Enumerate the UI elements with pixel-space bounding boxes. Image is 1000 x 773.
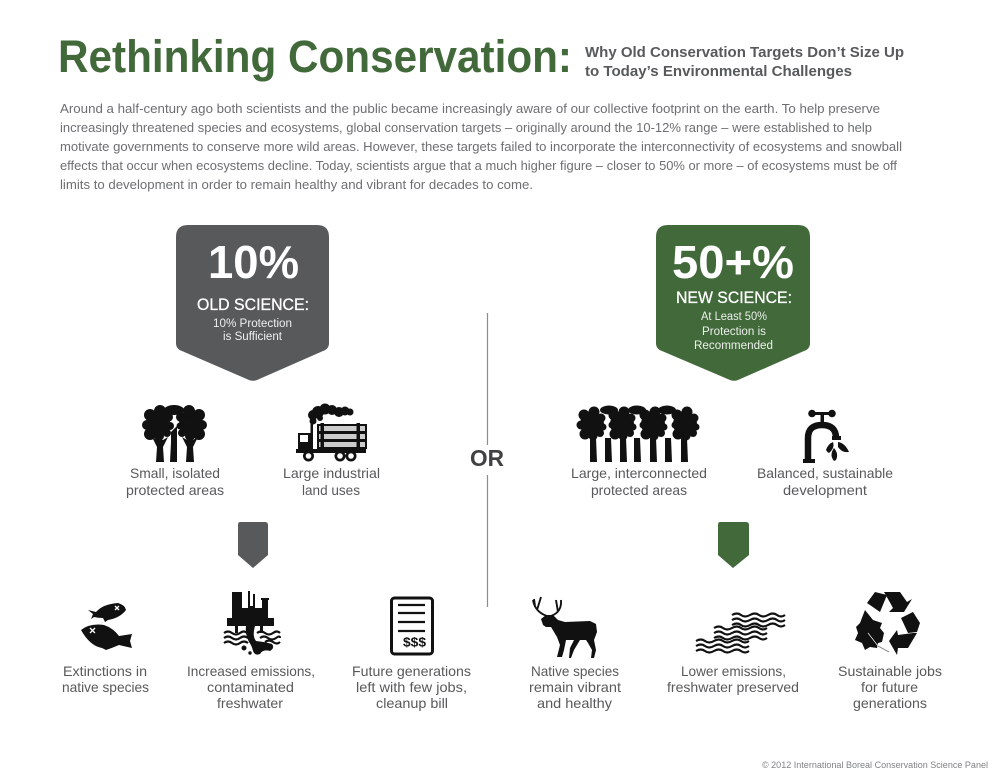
label [352, 664, 471, 711]
subtitle: to Today’s Environmental Challenges [585, 64, 852, 80]
intro text block: motivate governments to conserve more wild areas. However, these targets failed to incorporate the interconnectivity of ecosystems and snowball [60, 140, 902, 154]
item: sustainable jobs [838, 592, 942, 711]
label [667, 664, 799, 695]
label: Increased emissions, [187, 664, 315, 679]
label [126, 466, 224, 498]
label: Balanced, sustainable [757, 466, 893, 481]
subtitle [585, 45, 904, 80]
item: extinctions in native species [62, 603, 149, 695]
label: protected areas [591, 483, 687, 498]
label: generations [853, 696, 927, 711]
label: Lower emissions, [681, 664, 786, 679]
title: Rethinking Conservation: [58, 31, 572, 82]
panel: old science badge [176, 225, 329, 381]
label: Extinctions in [63, 664, 147, 679]
panel: old science badge: is Sufficient [223, 331, 283, 343]
icon: dead fish [81, 603, 132, 650]
icon: bill: $$$ [403, 636, 426, 650]
label: Native species [531, 664, 619, 679]
label: remain vibrant [529, 680, 621, 695]
intro text block: effects that occur when ecosystems decline. Today, scientists argue that a much higher figure – closer to 50% or more – of ecosystems must be off [60, 159, 898, 173]
label [571, 466, 707, 498]
icon: faucet with leaves [803, 410, 849, 463]
panel: old science badge: OLD SCIENCE: [197, 295, 309, 314]
panel: new science badge: Protection is [702, 326, 766, 338]
copyright: © 2012 International Boreal Conservation Science Panel [762, 760, 988, 770]
item: balanced sustainable development [757, 410, 893, 498]
label: contaminated [207, 680, 294, 695]
label: freshwater [217, 696, 283, 711]
label [62, 664, 149, 695]
item: native species [529, 597, 621, 711]
icon: water waves [696, 614, 785, 652]
intro text block: limits to development in order to remain healthy and vibrant for decades to come. [60, 178, 533, 192]
label [187, 664, 315, 711]
label: Future generations [352, 664, 471, 679]
subtitle: Why Old Conservation Targets Don’t Size Up [585, 45, 904, 61]
panel: old science badge: 10% Protection [213, 318, 292, 330]
intro text block: Around a half-century ago both scientists and the public became increasingly aware of our collective footprint on the earth. To help preserve [60, 102, 880, 116]
label: left with few jobs, [356, 680, 467, 695]
panel: new science badge: 50+% [672, 236, 794, 288]
label: Large industrial [283, 466, 380, 481]
label: for future [861, 680, 918, 695]
panel: new science badge: Recommended [694, 340, 773, 352]
item: large interconnected protected areas [571, 406, 707, 498]
icon: logging truck [296, 404, 367, 462]
label: protected areas [126, 483, 224, 498]
item: increased emissions, contaminated freshwater [187, 591, 315, 711]
panel: old science badge: 10% [208, 236, 299, 288]
label: and healthy [537, 696, 612, 711]
label [283, 466, 380, 498]
icon: row of trees [576, 406, 700, 462]
label: Small, isolated [130, 466, 220, 481]
divider with OR: OR [470, 445, 504, 471]
item: future generations [352, 598, 471, 711]
label: development [783, 483, 867, 498]
arrow: new science [718, 522, 749, 568]
item: lower emissions [667, 614, 799, 695]
label: land uses [302, 483, 360, 498]
panel: new science badge: At Least 50% [701, 311, 767, 323]
panel: new science badge: NEW SCIENCE: [676, 288, 792, 307]
label [529, 664, 621, 711]
label: cleanup bill [376, 696, 448, 711]
item: small isolated protected areas [126, 405, 224, 498]
arrow: old science [238, 522, 268, 568]
label [838, 664, 942, 711]
label [757, 466, 893, 498]
label: Sustainable jobs [838, 664, 942, 679]
label: freshwater preserved [667, 680, 799, 695]
intro text block [60, 102, 902, 192]
panel: new science badge [656, 225, 810, 381]
icon: recycling symbol with leaf [855, 592, 920, 655]
icon: refinery and oil spill [224, 591, 280, 655]
intro text block: increasingly threatened species and ecosystems, global conservation targets – originally around the 10-12% range – were established to help [60, 121, 872, 135]
item: large industrial land uses [283, 404, 380, 498]
label: native species [62, 680, 149, 695]
label: Large, interconnected [571, 466, 707, 481]
icon: deer [533, 597, 597, 658]
icon: three trees [142, 405, 207, 462]
